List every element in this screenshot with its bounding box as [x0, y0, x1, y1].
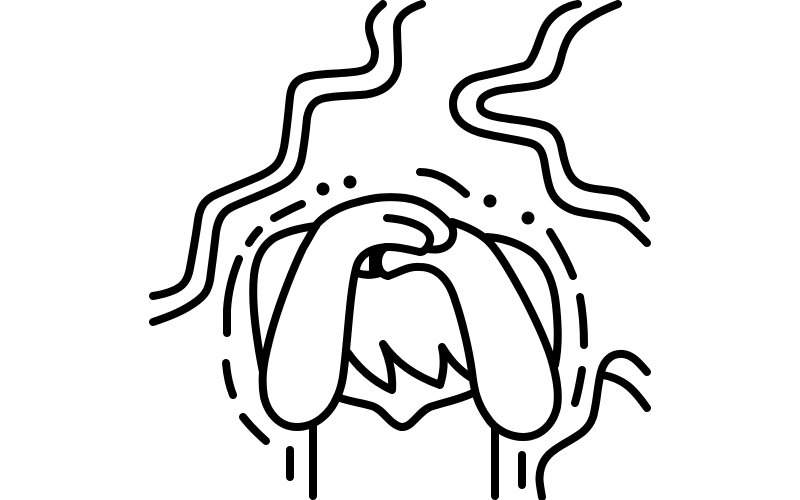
- right wavy lines: [453, 4, 647, 243]
- chin: [340, 393, 473, 427]
- right arm: [388, 222, 558, 437]
- left wavy lines: [153, 4, 422, 322]
- dots: [316, 176, 534, 224]
- hair fringe: [348, 344, 470, 390]
- left arm and hand: [263, 197, 453, 427]
- fingers: [357, 247, 388, 276]
- neck: [313, 427, 495, 496]
- dashed halo around head: [226, 172, 584, 485]
- lower right wavy lines: [539, 354, 647, 497]
- hair outline: [253, 226, 558, 372]
